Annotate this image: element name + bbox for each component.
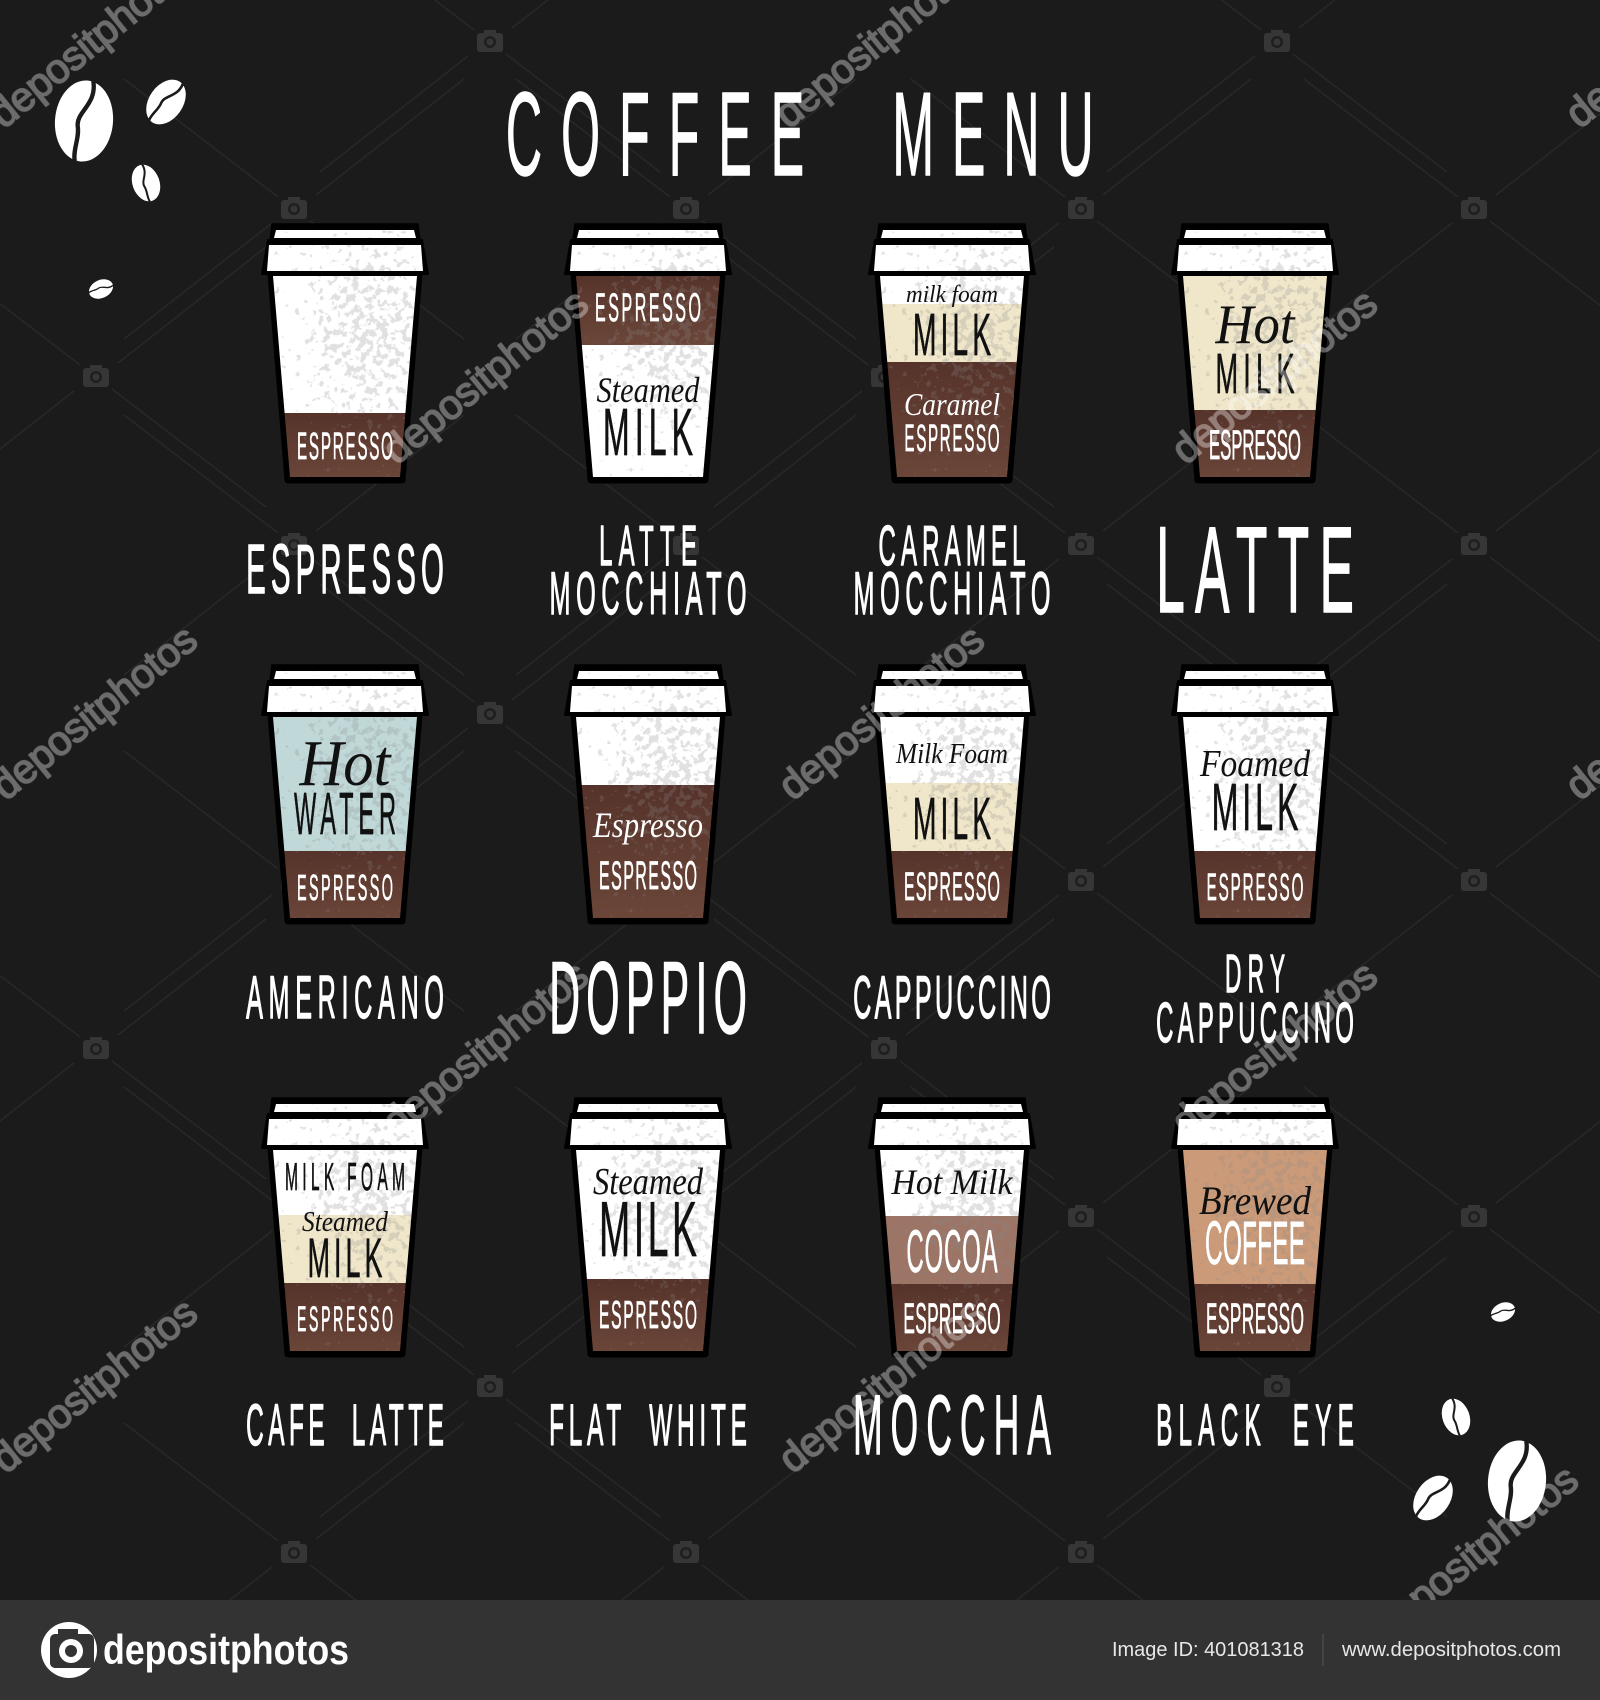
label: latte mocchiato: MOCCHIATO [550,559,746,627]
watermarks: depositphotos [373,951,597,1145]
label: caramel mocchiato [854,514,1050,627]
label: americano: AMERICANO [246,963,444,1031]
footer logo icon [41,1622,97,1678]
title: MENU [892,68,1094,201]
label: flat white: FLAT WHITE [549,1394,747,1458]
coffee beans top left [52,72,194,302]
cup layers [576,717,720,918]
espresso text: ESPRESSO [595,286,701,330]
milk text: MILK [1212,770,1298,845]
espresso text: ESPRESSO [1207,867,1303,909]
watermarks: depositphotos [1363,1455,1587,1649]
hot text: Hot [299,727,392,800]
milk foam text: milk foam [906,282,998,308]
cup: caramel mocchiato [867,223,1037,483]
cup layers [1183,1150,1327,1351]
cup layers [273,717,417,918]
cup layers [880,717,1024,918]
brewed text: Brewed [1199,1178,1312,1223]
cup: doppio [563,664,733,924]
label: espresso: ESPRESSO [246,530,444,609]
milk text: MILK [913,301,991,368]
cup: cafe latte [260,1097,430,1357]
label: cafe latte: CAFE LATTE [246,1394,444,1458]
milk text: MILK [1215,343,1295,406]
espresso text: ESPRESSO [599,854,697,898]
milk text: MILK [913,785,991,852]
footer logo wordmark: depositphotos [103,1626,349,1673]
espresso text: ESPRESSO [297,1299,393,1339]
label: dry cappuccino [1156,944,1354,1055]
image id: Image ID: 401081318 [1112,1639,1304,1661]
cup layers [273,1150,417,1351]
coffee text: COFFEE [1205,1209,1305,1277]
cup: cappuccino [867,664,1037,924]
steamed text: Steamed [593,1161,704,1203]
hot milk text: Hot Milk [891,1162,1013,1202]
steamed text: Steamed [302,1207,389,1238]
watermarks: depositphotos [373,279,597,473]
label: caramel mocchiato: CARAMEL [878,514,1026,578]
cup: flat white [563,1097,733,1357]
title [506,68,1094,201]
cup: dry cappuccino [1170,664,1340,924]
cup layers [1183,276,1327,477]
espresso text: ESPRESSO [903,1294,1001,1342]
milk foam text: MILK FOAM [285,1156,405,1199]
footer bar [0,1600,1600,1700]
title: COFFEE [506,68,804,201]
espresso text: ESPRESSO [904,865,1000,909]
espresso text: ESPRESSO [297,426,393,468]
label: caramel mocchiato: MOCCHIATO [854,559,1050,627]
label: doppio: DOPPIO [549,940,747,1055]
caramel text: Caramel [904,386,1000,422]
cup layers [576,276,720,477]
watermarks: depositphotos [769,615,993,809]
website: www.depositphotos.com [1341,1639,1561,1661]
footer divider [1322,1634,1324,1666]
watermarks: depositphotos [1162,279,1386,473]
cocoa text: COCOA [906,1218,998,1285]
milk foam text: Milk Foam [895,739,1008,770]
milk text: MILK [308,1227,382,1290]
cup layers [576,1150,720,1351]
label: black eye: BLACK EYE [1156,1394,1354,1458]
steamed text: Steamed [596,370,700,410]
cup: espresso [260,223,430,483]
label: moccha: MOCCHA [853,1378,1051,1472]
cup: moccha [867,1097,1037,1357]
espresso text: ESPRESSO [904,418,1000,460]
cup: latte mocchiato [563,223,733,483]
label: dry cappuccino: DRY [1225,944,1285,1004]
espresso text: ESPRESSO [297,867,393,908]
cup layers [1183,717,1327,918]
cup: americano [260,664,430,924]
espresso text: ESPRESSO [599,1294,697,1337]
cup layers [273,276,417,477]
label: cappuccino: CAPPUCCINO [853,963,1051,1031]
hot text: Hot [1215,294,1296,356]
cup layers [880,1150,1024,1351]
coffee beans bottom right [1405,1299,1549,1528]
milk text: MILK [603,395,693,470]
espresso text: ESPRESSO [1209,421,1301,468]
foamed text: Foamed [1199,743,1311,785]
label: dry cappuccino: CAPPUCCINO [1156,991,1354,1055]
label: latte mocchiato [550,514,746,627]
watermarks: depositphotos [1162,951,1386,1145]
label: latte mocchiato: LATTE [599,514,697,578]
cup: latte [1170,223,1340,483]
espresso script text: Espresso [592,805,703,845]
cup layers [880,276,1024,477]
cup: black eye [1170,1097,1340,1357]
espresso text: ESPRESSO [1206,1294,1304,1342]
milk text: MILK [599,1186,697,1273]
label: latte: LATTE [1156,501,1354,638]
watermarks: depositphotos [769,1288,993,1482]
water text: WATER [294,780,396,847]
